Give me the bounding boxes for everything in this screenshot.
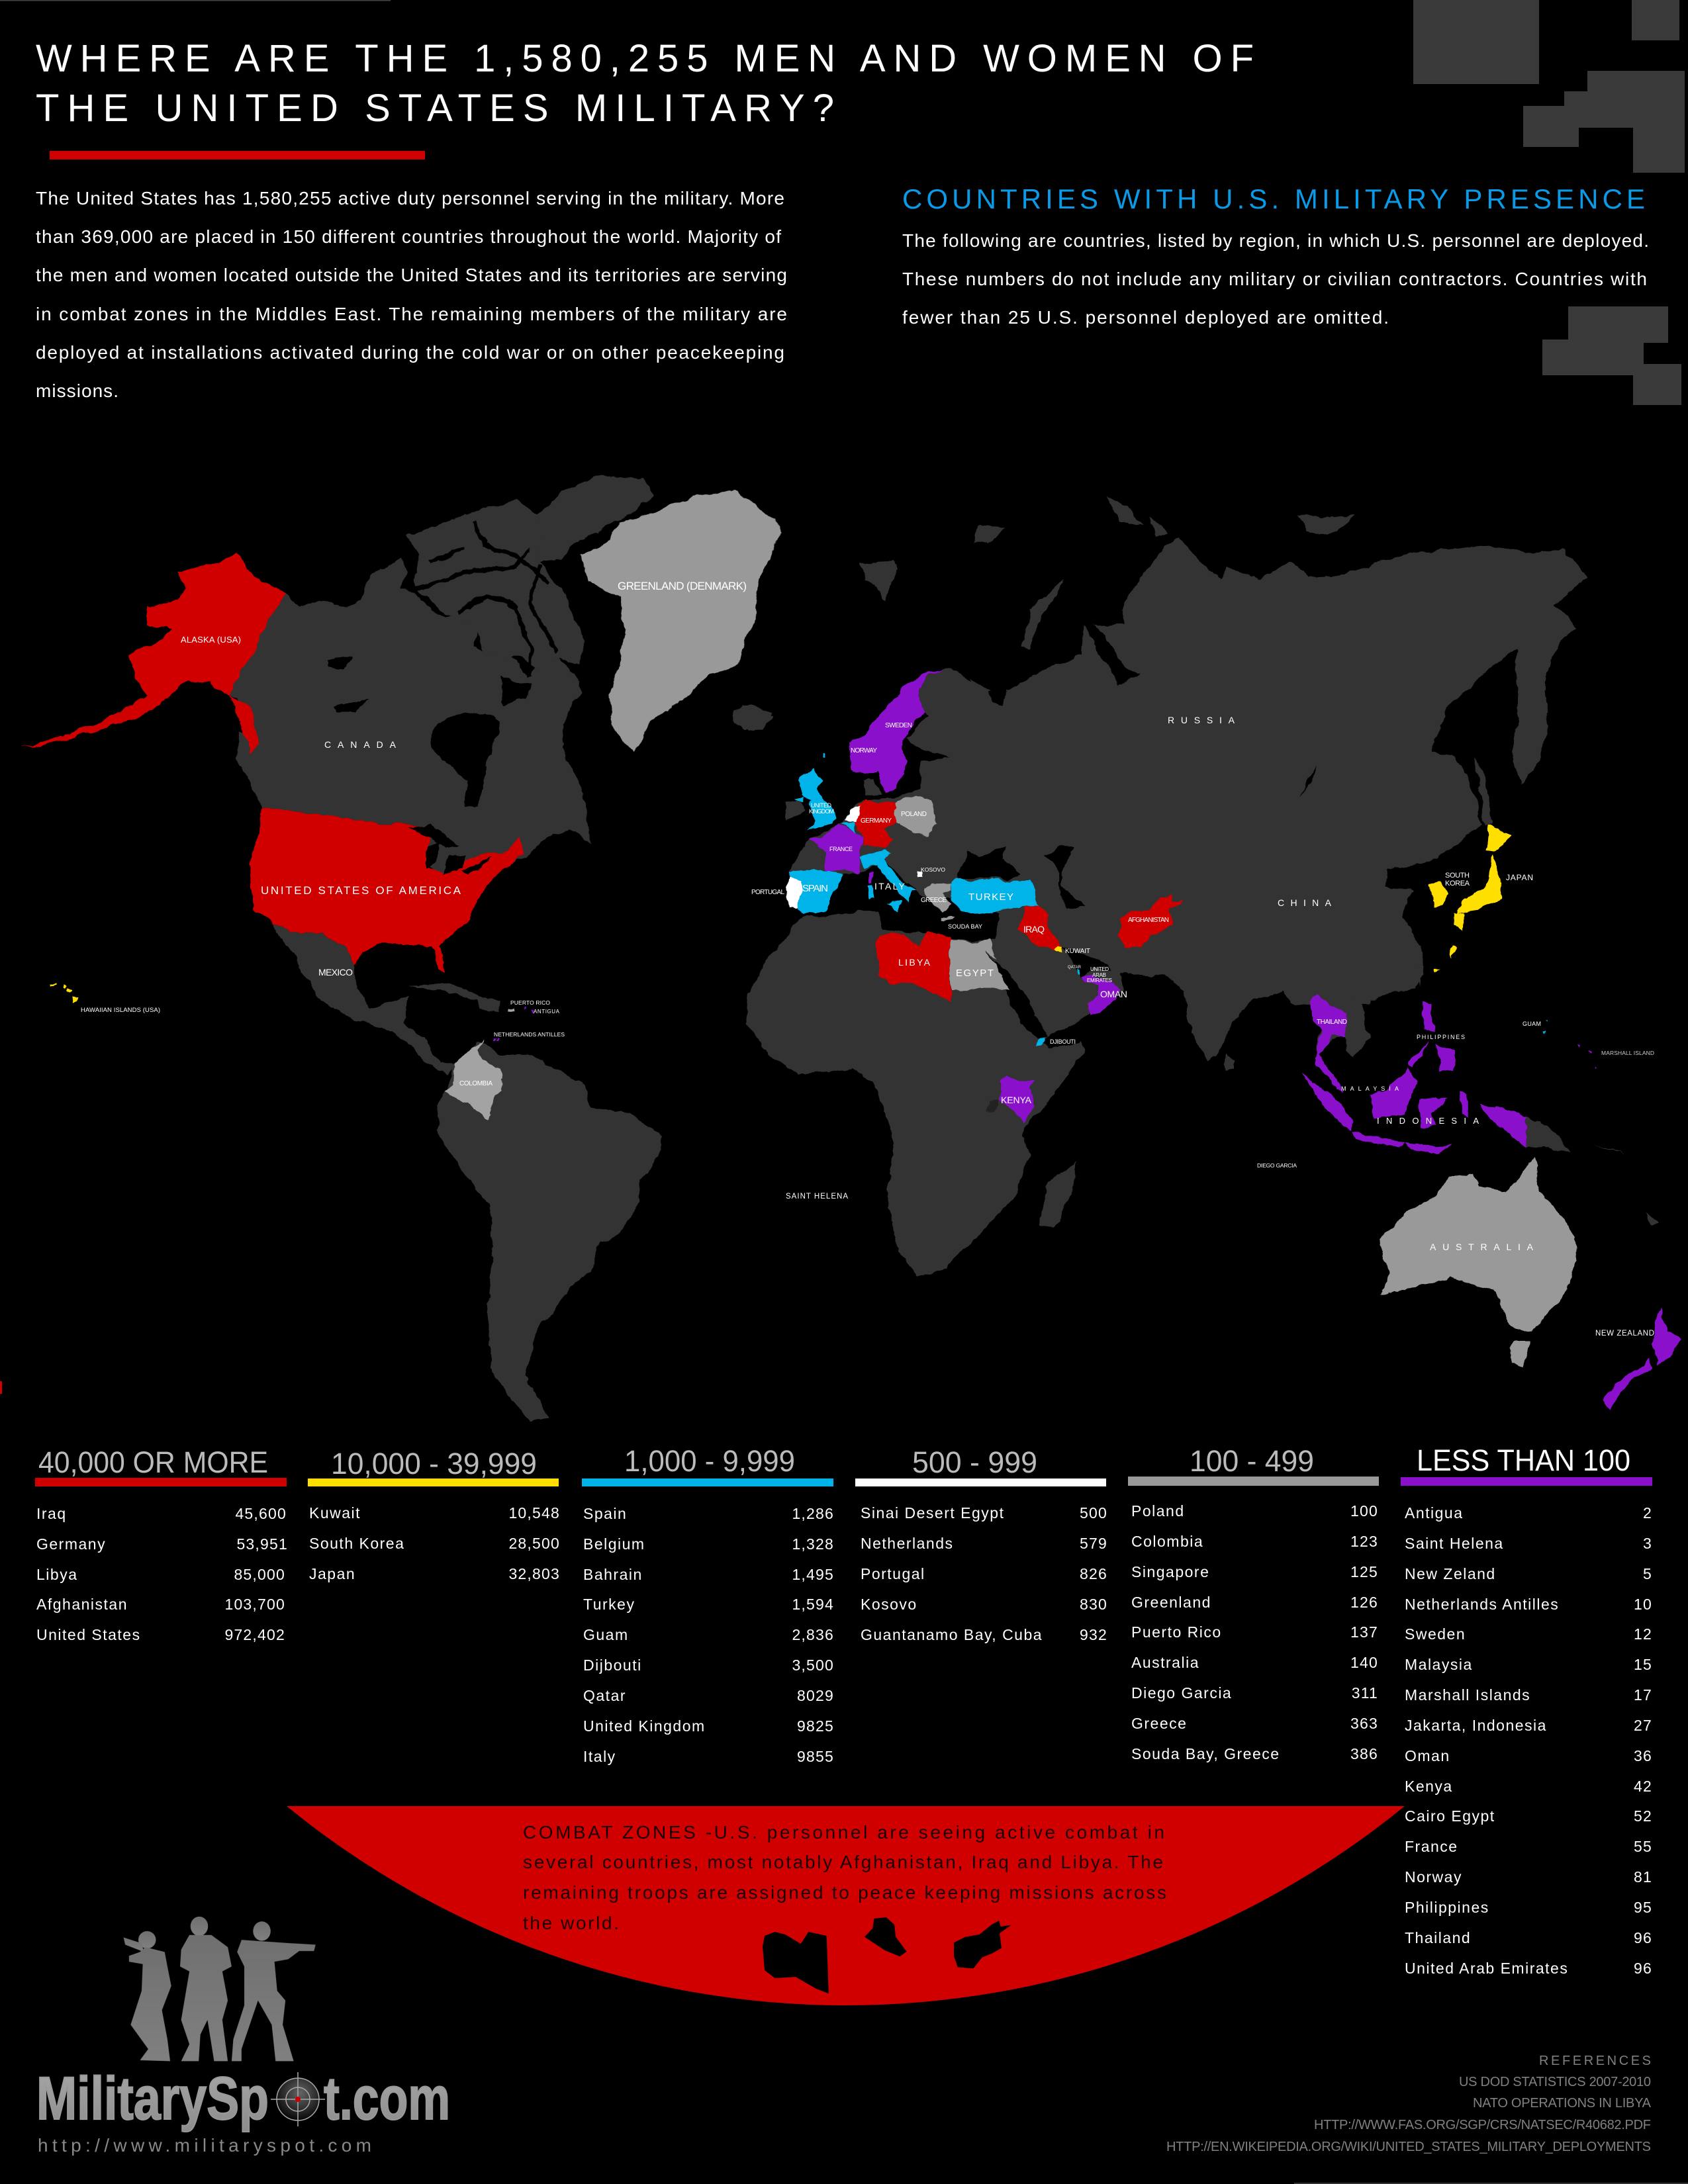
map: country labels: QATAR [1068,966,1082,970]
map: small island markers, Hawaii and Caribbean [52,983,534,1041]
map: country labels: SWEDEN [885,722,912,729]
legend column: 500 - 999: 579 [1080,1535,1107,1552]
legend column: less than 100: 96 [1634,1960,1652,1977]
map: country labels: DIEGO GARCIA [1257,1162,1297,1169]
legend column: 40,000 or more: Afghanistan [36,1596,128,1613]
map: country labels: ALASKA (USA) [181,635,241,645]
title: WHERE ARE THE 1,580,255 MEN AND WOMEN OF [36,37,1254,80]
legend column: 10,000 - 39,999: 10,548 [508,1504,560,1522]
map: Europe land [732,668,1000,1113]
legend column: 1,000 - 9,999: Turkey [583,1596,635,1613]
Portugal [787,879,802,909]
map: country labels: TURKEY [968,891,1013,903]
legend column: 500 - 999 [855,1445,1107,1643]
legend column: 100 - 499: 100 [1350,1502,1378,1520]
Philippines [1409,1002,1455,1069]
legend column: less than 100: 95 [1634,1899,1652,1916]
France [810,825,873,883]
legend column: 500 - 999: 830 [1080,1596,1107,1613]
intro paragraph: missions. [36,381,118,401]
map: country labels: SOUTH [1445,872,1470,880]
legend column: 500 - 999: 932 [1080,1626,1107,1643]
legend column: 500 - 999: Kosovo [861,1596,917,1613]
Italy [860,848,915,911]
legend column: 100 - 499: Australia [1131,1654,1199,1671]
map: country labels: LIBYA [898,957,931,968]
map: country labels: CHINA [1278,897,1332,908]
map: country labels: SPAIN [802,883,828,894]
legend column: 40,000 or more: 103,700 [224,1596,285,1613]
countries description text: These numbers do not include any military or civilian contractors. Countries with [902,269,1647,289]
legend column: 1,000 - 9,999: Bahrain [583,1566,643,1583]
legend column: less than 100: 36 [1634,1747,1652,1764]
map: country labels: EGYPT [956,968,994,979]
intro paragraph: The United States has 1,580,255 active duty personnel serving in the military. More [36,188,784,208]
map: country labels: GREENLAND (DENMARK) [618,580,747,592]
intro paragraph: the men and women located outside the United States and its territories are serving [36,265,787,285]
map: country labels: IRAQ [1023,924,1045,934]
title [36,37,1254,130]
legend column: 1,000 - 9,999: Qatar [583,1687,626,1704]
legend column: less than 100: Netherlands Antilles [1405,1596,1559,1613]
countries description text: fewer than 25 U.S. personnel deployed are omitted. [902,307,1389,328]
legend column: 100 - 499: 140 [1350,1654,1378,1671]
map: country labels: PORTUGAL [751,889,784,896]
intro paragraph: in combat zones in the Middles East. The remaining members of the military are [36,304,787,324]
icon: Libya silhouette [763,1932,829,1993]
legend column: 10,000 - 39,999: Kuwait [309,1504,361,1522]
legend column: 100 - 499: 125 [1350,1563,1378,1580]
legend column: 100 - 499 [1128,1444,1379,1762]
map: country labels: NORWAY [851,747,877,754]
legend column: 1,000 - 9,999: 1,328 [792,1535,834,1553]
map: country labels: INDONESIA [1377,1116,1479,1126]
legend column: 40,000 or more: 45,600 [235,1505,287,1522]
legend column: 40,000 or more: 85,000 [234,1566,285,1583]
combat zones panel [287,1806,1405,2005]
legend column: less than 100: France [1405,1838,1458,1855]
legend column: less than 100: Norway [1405,1868,1462,1886]
legend column: 40,000 or more: 53,951 [236,1535,288,1553]
Qatar [1076,968,1080,975]
Poland [892,797,936,835]
legend column: 1,000 - 9,999: 1,594 [792,1596,834,1613]
legend column: less than 100: 42 [1634,1778,1652,1795]
map: country labels: POLAND [901,811,927,818]
legend column: 500 - 999: Portugal [861,1565,925,1582]
map: country labels: KUWAIT [1065,948,1090,955]
map: Americas land [229,475,773,1421]
map: country labels: PUERTO RICO [510,999,550,1006]
map: country labels: KOSOVO [921,866,945,873]
Japan and South Korea [1429,825,1511,972]
map: country labels: GREECE [921,897,947,904]
countries description text [902,230,1649,328]
logo: MilitarySpot.com: t.com [324,2065,450,2132]
map: country labels: KOREA [1445,880,1470,887]
legend column: 40,000 or more: Germany [36,1535,106,1553]
legend column: 500 - 999: Sinai Desert Egypt [861,1504,1004,1522]
legend column: 1,000 - 9,999: 1,495 [792,1566,834,1583]
United Kingdom [796,755,837,831]
website url: http://www.militaryspot.com [38,2135,371,2156]
legend column: 40,000 or more: United States [36,1626,141,1643]
map: country labels: AFGHANISTAN [1128,917,1169,924]
Kenya [998,1074,1037,1122]
map: country labels: FRANCE [829,846,853,852]
map: Arctic channels [414,522,557,678]
legend column: 1,000 - 9,999 [582,1444,834,1765]
Kosovo [915,872,921,879]
Australia [1380,1158,1577,1368]
legend column: 40,000 or more: 40,000 OR MORE [38,1445,268,1479]
legend column: less than 100: Antigua [1405,1504,1464,1522]
legend column: less than 100: 96 [1634,1929,1652,1946]
references: HTTP://EN.WIKEIPEDIA.ORG/WIKI/UNITED_STATES_MILITARY_DEPLOYMENTS [1166,2140,1651,2154]
references: REFERENCES [1539,2054,1651,2068]
legend column: 1,000 - 9,999: 2,836 [792,1626,834,1643]
Kuwait [1054,947,1063,954]
legend column: 1,000 - 9,999: United Kingdom [583,1717,706,1735]
map: country labels: UNITED [1090,966,1109,972]
legend column: 100 - 499: Diego Garcia [1131,1684,1232,1702]
legend column: 500 - 999: Netherlands [861,1535,954,1552]
Thailand and Malaysia peninsula [1309,996,1347,1093]
combat zones text: remaining troops are assigned to peace keeping missions across [523,1882,1166,1903]
logo: MilitarySpot.com: MilitarySp [36,2065,269,2132]
legend column: 500 - 999: 826 [1080,1565,1107,1582]
legend column: 10,000 - 39,999 [308,1447,560,1582]
references: US DOD STATISTICS 2007-2010 [1459,2075,1651,2089]
map: country labels: EMIRATES [1087,978,1112,983]
legend column: 1,000 - 9,999: 9825 [797,1717,834,1735]
legend column: 100 - 499: Poland [1131,1502,1185,1520]
map: inland seas and lakes [328,623,1313,1038]
legend column: 10,000 - 39,999: 28,500 [508,1535,560,1552]
Sweden and Norway [849,668,946,794]
decorative camouflage blocks [1413,0,1685,405]
map: country labels: DJIBOUTI [1050,1038,1076,1045]
legend column: 1,000 - 9,999: 9855 [797,1748,834,1765]
Oman and United Arab Emirates [1081,976,1121,1017]
legend column: less than 100: Saint Helena [1405,1535,1504,1552]
title: THE UNITED STATES MILITARY? [36,87,834,130]
legend column: 40,000 or more: 972,402 [224,1626,285,1643]
Turkey [952,878,1039,913]
legend column: 100 - 499: 386 [1350,1745,1378,1762]
heading: countries with U.S. military presence: COUNTRIES WITH U.S. MILITARY PRESENCE [902,183,1645,214]
legend column: 10,000 - 39,999: 10,000 - 39,999 [331,1447,537,1480]
Germany [855,797,896,846]
legend column: 100 - 499: 123 [1350,1533,1378,1550]
intro paragraph [36,188,787,401]
legend column: 500 - 999: Guantanamo Bay, Cuba [861,1626,1043,1643]
countries description text: The following are countries, listed by region, in which U.S. personnel are deployed. [902,230,1649,251]
Afghanistan [1119,895,1183,948]
legend column: 1,000 - 9,999: 1,286 [792,1505,834,1522]
legend column: less than 100: Malaysia [1405,1656,1473,1673]
map: country labels: THAILAND [1317,1019,1347,1026]
legend column: 10,000 - 39,999: South Korea [309,1535,404,1552]
legend column: 500 - 999: 500 - 999 [912,1445,1037,1479]
map: country labels: KENYA [1001,1095,1032,1105]
map: country labels: UNITED [811,802,831,809]
map: country labels: ANTIGUA [534,1009,560,1015]
map: country labels: RUSSIA [1168,715,1235,725]
map shapes [22,475,1681,1421]
map: country labels: ARAB [1092,972,1106,978]
legend column: less than 100: New Zeland [1405,1565,1496,1582]
map: country labels: CANADA [324,739,397,750]
legend column: 1,000 - 9,999: Belgium [583,1535,645,1553]
legend column: less than 100: 55 [1634,1838,1652,1855]
legend column: less than 100: United Arab Emirates [1405,1960,1568,1977]
legend column: less than 100: Oman [1405,1747,1450,1764]
map: country labels: NEW ZEALAND [1595,1330,1654,1338]
Egypt [949,938,1008,989]
legend column: less than 100: Sweden [1405,1625,1466,1643]
legend column: less than 100: 15 [1634,1656,1652,1673]
legend column: less than 100: 3 [1643,1535,1652,1552]
Djibouti [1037,1038,1044,1046]
combat zones text [523,1822,1166,1933]
icon: three soldiers silhouette [124,1917,316,2061]
New Zealand [1603,1308,1681,1409]
icon: Iraq silhouette [865,1917,907,1956]
map: country labels: OMAN [1100,989,1127,999]
legend column: less than 100: 52 [1634,1807,1652,1825]
map: country labels: UNITED STATES OF AMERICA [261,884,461,897]
map: country labels: KINGDOM [809,808,834,815]
map: country labels: MARSHALL ISLAND [1601,1050,1654,1056]
intro paragraph: deployed at installations activated during the cold war or on other peacekeeping [36,342,784,363]
Indonesia and Malaysia [1301,1066,1526,1155]
combat zones text: several countries, most notably Afghanistan, Iraq and Libya. The [523,1852,1163,1872]
map: country labels: GUAM [1523,1021,1541,1027]
legend column: 1,000 - 9,999: Spain [583,1505,627,1522]
legend column: 10,000 - 39,999: Japan [309,1565,355,1582]
map: Greenland [581,491,783,754]
legend column: 10,000 - 39,999: 32,803 [508,1565,560,1582]
legend column: 1,000 - 9,999: 8029 [797,1687,834,1704]
legend column: 1,000 - 9,999: 3,500 [792,1657,834,1674]
map: country labels: NETHERLANDS ANTILLES [494,1031,565,1038]
map: Great Lakes [409,825,492,874]
legend column: 1,000 - 9,999: Dijbouti [583,1657,642,1674]
map: country labels: SAINT HELENA [786,1193,848,1201]
map: country labels: HAWAIIAN ISLANDS (USA) [81,1007,160,1014]
intro paragraph: than 369,000 are placed in 150 different countries throughout the world. Majority of [36,226,781,247]
legend column: 100 - 499: 311 [1352,1684,1378,1702]
legend column: 100 - 499: 100 - 499 [1190,1444,1314,1478]
combat zones text: COMBAT ZONES -U.S. personnel are seeing active combat in [523,1822,1164,1843]
Marshall Islands and Guam [1577,1044,1595,1069]
map: country labels: AUSTRALIA [1430,1242,1534,1252]
legend column: less than 100: 2 [1643,1504,1652,1522]
legend column: less than 100: 81 [1634,1868,1652,1886]
legend column: 40,000 or more: Iraq [36,1505,67,1522]
map: country labels: MEXICO [318,967,353,978]
icon: Afghanistan silhouette [954,1921,1011,1968]
legend column: 100 - 499: 363 [1350,1715,1378,1732]
map: country labels: ITALY [874,881,906,891]
map: country labels: SOUDA BAY [948,923,982,930]
legend column: less than 100: 17 [1634,1686,1652,1704]
map: Europe, Middle East and Africa highlighted countries [787,668,1121,1122]
legend column: less than 100 [1401,1443,1652,1977]
legend column: less than 100: 12 [1634,1625,1652,1643]
legend column: 500 - 999: 500 [1080,1504,1107,1522]
legend column: less than 100: Philippines [1405,1899,1489,1916]
legend column: 100 - 499: 137 [1350,1623,1378,1641]
world map [0,475,1681,1421]
Iraq [1015,905,1062,953]
Libya [876,932,952,1001]
Netherlands [847,808,861,821]
map: country labels: COLOMBIA [459,1080,492,1087]
legend column: less than 100: Cairo Egypt [1405,1807,1495,1825]
map: Asia and Oceania highlighted countries [1119,825,1681,1409]
map: country labels [81,580,1654,1338]
map: Colombia [445,1007,514,1121]
legend column: 100 - 499: Singapore [1131,1563,1209,1580]
legend column: 100 - 499: Puerto Rico [1131,1623,1222,1641]
legend column: 40,000 or more [35,1445,288,1643]
title underline bar [50,151,425,159]
map: country labels: MALAYSIA [1341,1085,1399,1092]
legend column: 100 - 499: Souda Bay, Greece [1131,1745,1280,1762]
map: country labels: PHILIPPINES [1417,1034,1465,1040]
legend column: less than 100: Jakarta, Indonesia [1405,1717,1547,1734]
legend column: 1,000 - 9,999: 1,000 - 9,999 [624,1444,795,1478]
legend column: less than 100: Thailand [1405,1929,1471,1946]
Greece [924,882,955,921]
legend column: less than 100: Kenya [1405,1778,1453,1795]
Belgium [842,821,856,833]
Spain [788,869,843,915]
legend column: 40,000 or more: Libya [36,1566,77,1583]
legend column: 100 - 499: Greece [1131,1715,1187,1732]
legend column: less than 100: 10 [1634,1596,1652,1613]
legend column: 100 - 499: Colombia [1131,1533,1203,1550]
references: NATO OPERATIONS IN LIBYA [1473,2096,1652,2111]
combat zones text: the world. [523,1913,619,1933]
references [1166,2054,1652,2154]
legend column: less than 100: 5 [1643,1565,1652,1582]
references: HTTP://WWW.FAS.ORG/SGP/CRS/NATSEC/R40682.PDF [1314,2118,1651,2132]
map: United States and Alaska [22,555,523,970]
map: country labels: JAPAN [1506,873,1533,882]
legend column: 100 - 499: Greenland [1131,1594,1211,1611]
map: Eurasia, Africa and Oceania land [747,497,1660,1277]
legend column: less than 100: LESS THAN 100 [1417,1443,1630,1477]
legend column: less than 100: 27 [1634,1717,1652,1734]
red semicircular panel [287,1806,1405,2005]
map: country labels: GERMANY [861,817,892,825]
icon: crosshair [271,2072,325,2126]
legend column: less than 100: Marshall Islands [1405,1686,1530,1704]
legend column: 1,000 - 9,999: Guam [583,1626,629,1643]
legend column: 100 - 499: 126 [1350,1594,1378,1611]
legend column: 1,000 - 9,999: Italy [583,1748,616,1765]
